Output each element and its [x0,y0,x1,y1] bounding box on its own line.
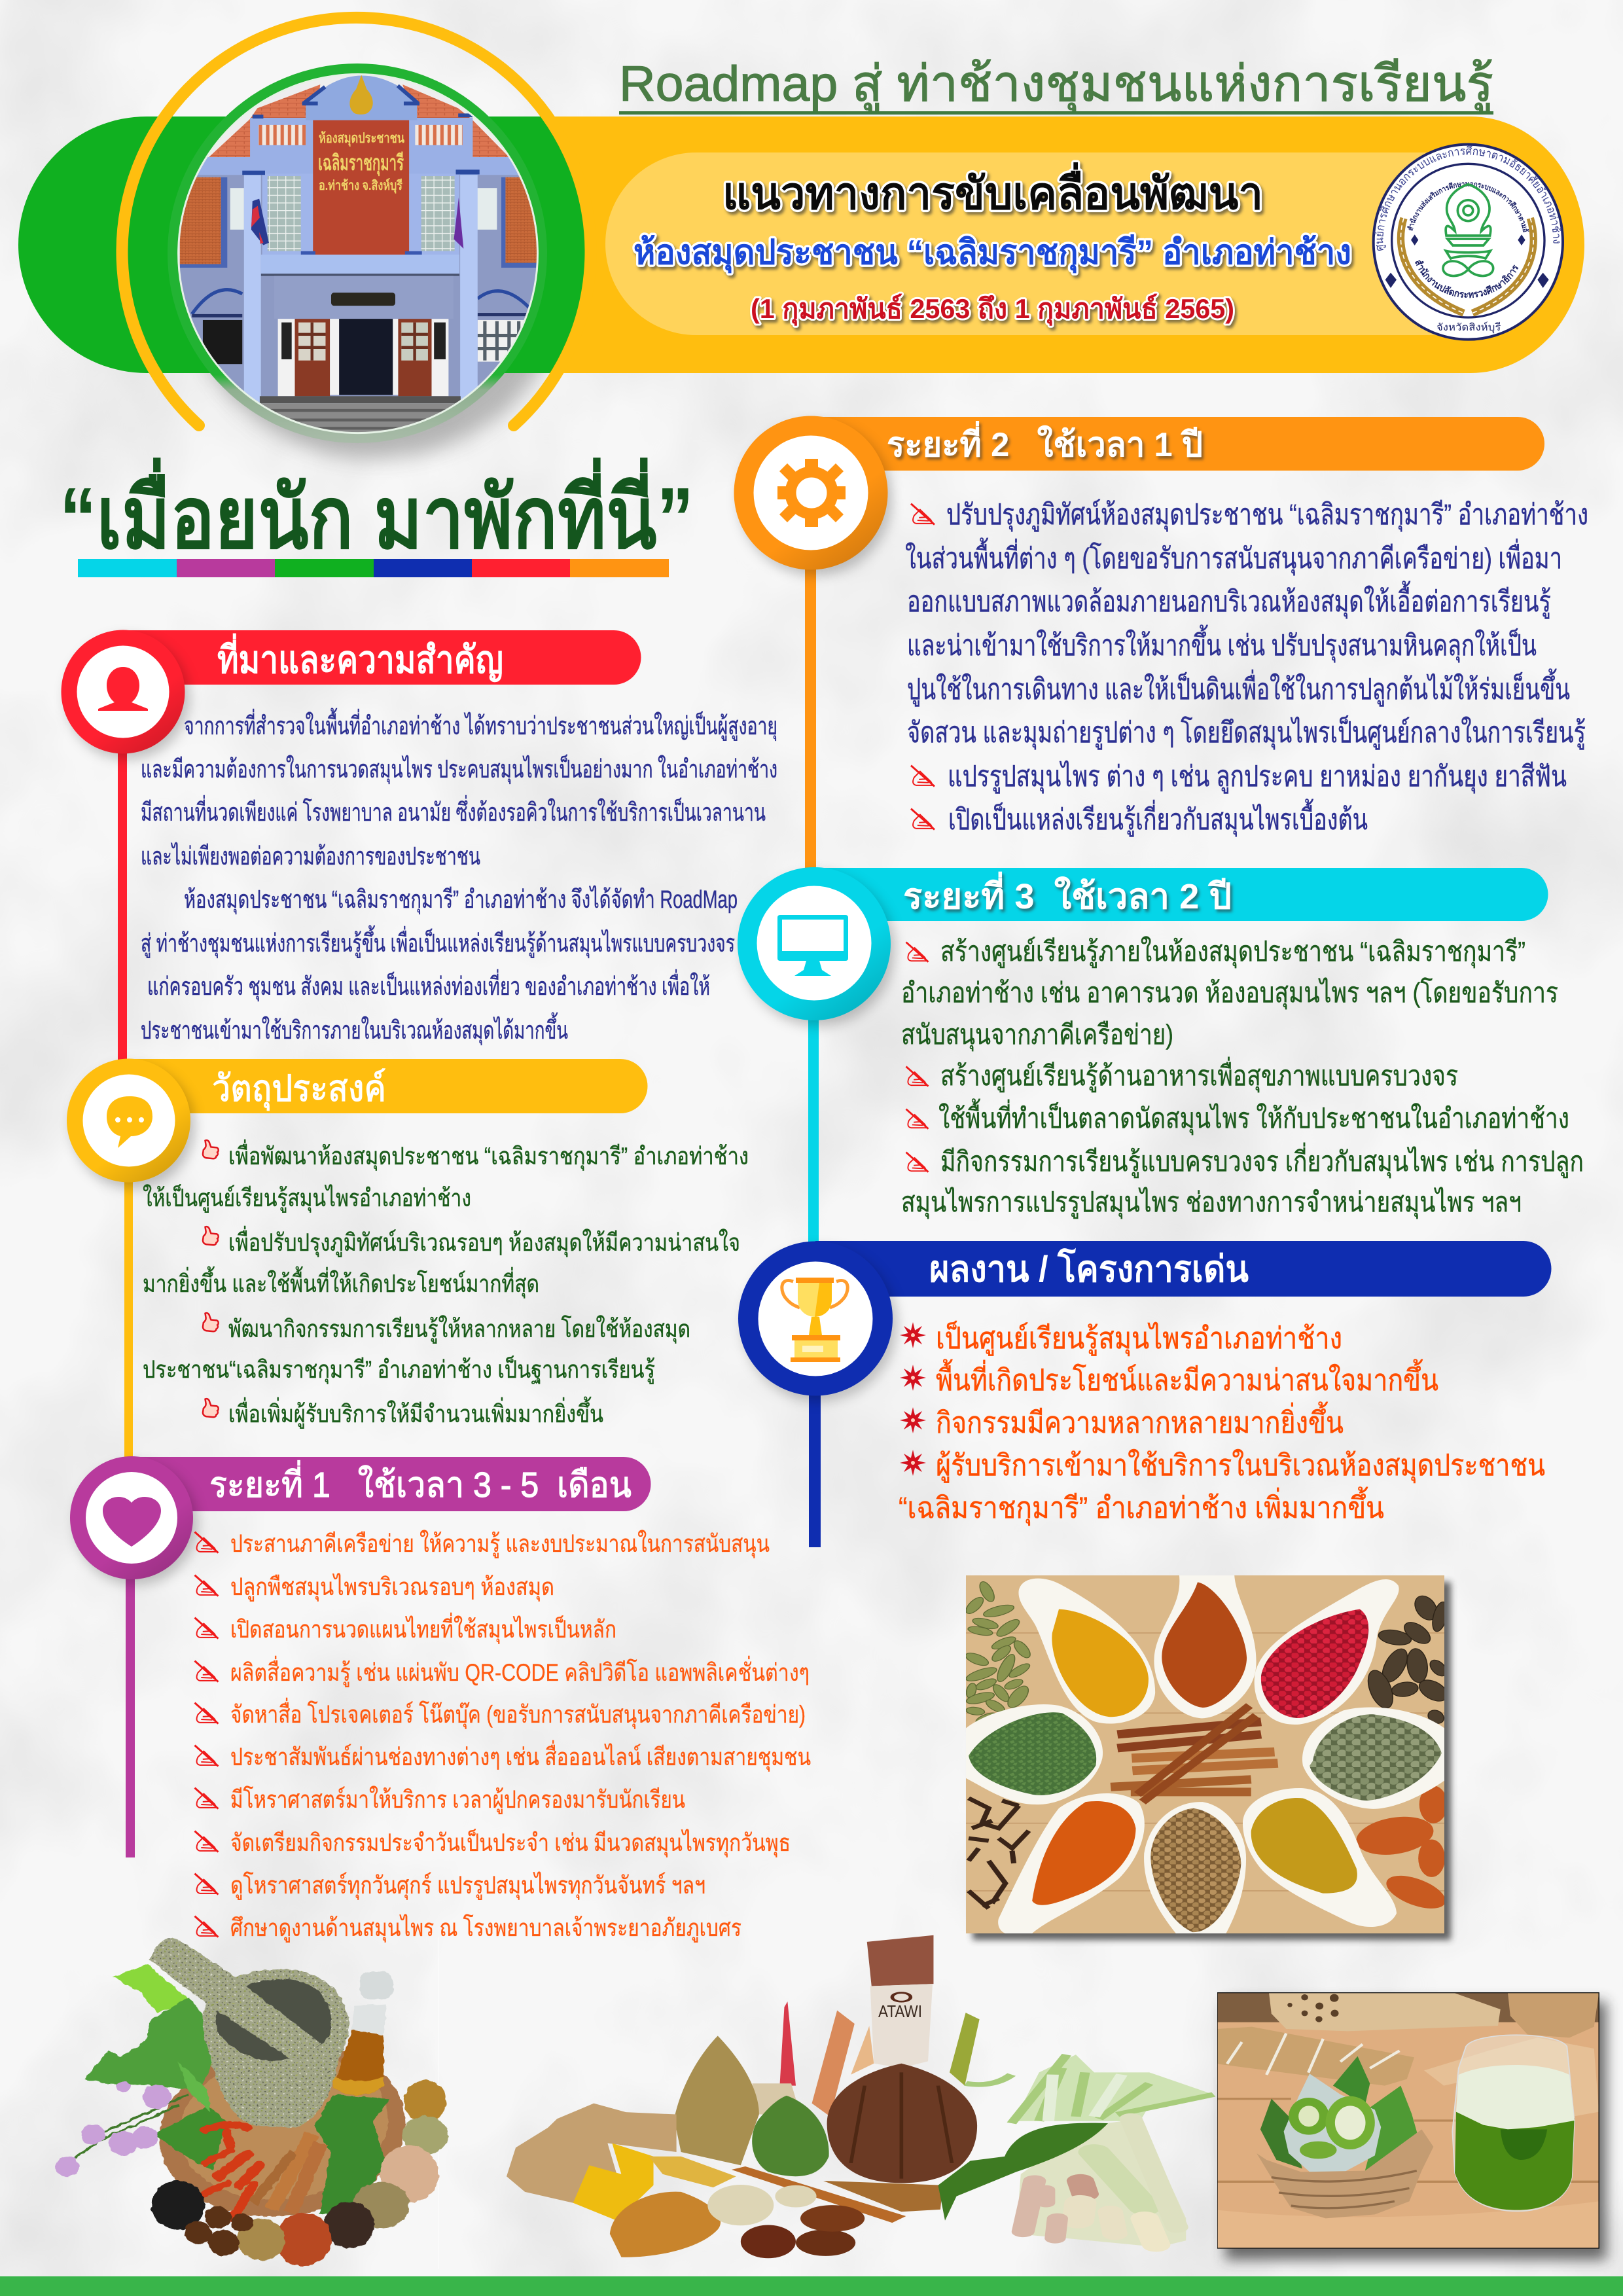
red header bar [123,630,641,685]
bottom green strip [0,2276,1623,2296]
photo soft shadow [190,118,563,458]
turmeric and spices [573,2143,906,2258]
body text: เพื่อพัฒนาห้องสมุดประชาชน “เฉลิมราชกุมารี” อำเภอท่าช้าง [228,1139,749,1171]
leaves and lemongrass [938,2054,1213,2247]
body text: พัฒนากิจกรรมการเรียนรู้ให้หลากหลาย โดยใช้ห้องสมุด [228,1315,690,1344]
red timeline [118,740,127,1067]
banner heading lines [633,162,1351,326]
body text: ให้เป็นศูนย์เรียนรู้สมุนไพรอำเภอท่าช้าง [143,1183,471,1213]
seal: สำนักงานปลัดกระทรวงศึกษาธิการ [1415,260,1518,298]
yellow circle badge [67,1059,190,1182]
heading: ที่มาและความสำคัญ [217,633,503,682]
icon: speech bubble [107,1096,152,1148]
body list [230,1530,811,1943]
orange circle badge [734,416,887,569]
green ring behind photo [168,63,547,443]
body text: ประชาชนเข้ามาใช้บริการภายในบริเวณห้องสมุดได้มากขึ้น [141,1012,568,1045]
body text [901,936,1584,1219]
red circle badge [62,630,185,754]
body list: มีโหราศาสตร์มาให้บริการ เวลาผู้ปกครองมารับนักเรียน [230,1785,685,1814]
heading: ผลงาน / โครงการเด่น [929,1247,1249,1289]
dates: (1 กุมภาพันธ์ 2563 ถึง 1 กุมภาพันธ์ 2565) [751,293,1234,326]
seal: ศูนย์การศึกษานอกระบบและการศึกษาตามอัธยาศัยอำเภอท่าช้าง [1374,145,1562,251]
body text: มากยิ่งขึ้น และใช้พื้นที่ให้เกิดประโยชน์มากที่สุด [143,1266,539,1299]
bullets: stars [900,1322,926,1476]
panel: phase 3 [738,867,1584,1244]
icon: trophy [782,1278,847,1362]
mace pieces [1351,1785,1453,1915]
body text [899,1321,1545,1526]
banner pale inner band [605,152,1440,335]
photo shadow: spices [972,1582,1451,1940]
icon: heart [103,1497,161,1547]
icon: person [98,667,148,711]
yellow header bar [128,1059,647,1113]
main heading: แนวทางการขับเคลื่อนพัฒนา [722,162,1263,219]
sign text on building: ห้องสมุดประชาชน [319,130,404,147]
panel: results [738,1241,1551,1547]
panel: phase 2 [734,416,1588,870]
body list: ปลูกพืชสมุนไพรบริเวณรอบๆ ห้องสมุด [230,1573,554,1602]
yellow timeline [124,1172,133,1460]
cloves [969,1798,1029,1909]
icon: monitor [777,915,848,976]
body text: สมุนไพรการแปรรูปสมุนไพร ช่องทางการจำหน่ายสมุนไพร ฯลฯ [901,1187,1522,1219]
body text: เพื่อปรับปรุงภูมิทัศน์บริเวณรอบๆ ห้องสมุดให้มีความน่าสนใจ [228,1225,740,1257]
library building photo [177,73,539,435]
body text: ห้องสมุดประชาชน “เฉลิมราชกุมารี” อำเภอท่าช้าง จึงได้จัดทำ RoadMap [184,886,738,914]
body list: ประชาสัมพันธ์ผ่านช่องทางต่างๆ เช่น สื่อออนไลน์ เสียงตามสายชุมชน [230,1740,811,1772]
purple header bar [132,1457,651,1511]
seal [1372,143,1564,341]
label on compress band: ATAWI [878,2001,922,2021]
panel: objectives [67,1059,749,1460]
purple timeline [126,1571,135,1857]
body list: ประสานภาคีเครือข่าย ให้ความรู้ และงบประมาณในการสนับสนุน [230,1530,770,1558]
bullets: thumbs [203,1140,219,1417]
body text: “เฉลิมราชกุมารี” อำเภอท่าช้าง เพิ่มมากขึ้น [899,1486,1384,1526]
body text: มีสถานที่นวดเพียงแค่ โรงพยาบาล อนามัย ซึ่งต้องรอคิวในการใช้บริการเป็นเวลานาน [141,795,766,827]
body list: ศึกษาดูงานด้านสมุนไพร ณ โรงพยาบาลเจ้าพระยาอภัยภูเบศร [230,1914,741,1943]
icon: gear [777,459,846,527]
banner orange band [497,117,1584,373]
big slogan: “เมื่อยนัก มาพักที่นี่” [60,457,694,566]
seal: จังหวัดสิงห์บุรี [1436,321,1501,334]
seal: สำนักงานส่งเสริมการศึกษานอกระบบและการศึกษาตามอัธยาศัย [1407,182,1529,232]
sign text on building [318,130,404,194]
banner green shape [18,117,586,373]
photo: mortar and herbs [55,1937,449,2267]
photo: bitter melon juice shadow [1225,2001,1607,2260]
body text: และมีความต้องการในการนวดสมุนไพร ประคบสมุนไพรเป็นอย่างมาก ในอำเภอท่าช้าง [141,754,777,784]
navy header bar [815,1241,1551,1297]
bullets: crossed pen [906,942,928,1172]
document title: Roadmap สู่ ท่าช้างชุมชนแห่งการเรียนรู้ [619,56,1493,114]
bullets: crossed pen [195,1532,219,1937]
purple circle badge [70,1456,193,1579]
heading: วัตถุประสงค์ [212,1067,386,1111]
heading: ระยะที่ 1 ใช้เวลา 3 - 5 เดือน [209,1460,632,1505]
body list: เปิดสอนการนวดแผนไทยที่ใช้สมุนไพรเป็นหลัก [230,1612,616,1644]
body text: เปิดเป็นแหล่งเรียนรู้เกี่ยวกับสมุนไพรเบื้องต้น [948,798,1368,837]
header banner [18,18,1584,458]
bullets: crossed pen [911,504,935,830]
body text: สร้างศูนย์เรียนรู้ด้านอาหารเพื่อสุขภาพแบบครบวงจร [940,1057,1458,1093]
cyan header bar [814,868,1548,921]
body list: ดูโหราศาสตร์ทุกวันศุกร์ แปรรูปสมุนไพรทุกวันจันทร์ ฯลฯ [230,1871,705,1900]
sub heading: ห้องสมุดประชาชน “เฉลิมราชกุมารี” อำเภอท่าช้าง [633,234,1351,274]
body list: จัดเตรียมกิจกรรมประจำวันเป็นประจำ เช่น มีนวดสมุนไพรทุกวันพุธ [230,1827,791,1857]
body text: พื้นที่เกิดประโยชน์และมีความน่าสนใจมากขึ้น [936,1359,1438,1397]
panel: background and importance [62,630,777,1067]
body text [905,499,1588,837]
body list: ผลิตสื่อความรู้ เช่น แผ่นพับ QR-CODE คลิปวิดีโอ แอพพลิเคชั่นต่างๆ [230,1655,810,1687]
body text: สู่ ท่าช้างชุมชนแห่งการเรียนรู้ขึ้น เพื่อเป็นแหล่งเรียนรู้ด้านสมุนไพรแบบครบวงจร [141,925,735,958]
sign text on building: อ.ท่าช้าง จ.สิงห์บุรี [319,178,402,194]
orange header bar [811,417,1544,471]
body text: จากการที่สำรวจในพื้นที่อำเภอท่าช้าง ได้ทราบว่าประชาชนส่วนใหญ่เป็นผู้สูงอายุ [184,708,777,741]
navy circle badge [738,1241,893,1395]
heading: ระยะที่ 2 ใช้เวลา 1 ปี [887,421,1203,464]
gold arc [122,18,590,425]
sign text on building: เฉลิมราชกุมารี [318,151,404,177]
cyan circle badge [738,867,891,1020]
colour bar [78,559,669,577]
body text: และไม่เพียงพอต่อความต้องการของประชาชน [141,842,480,870]
orange timeline [805,563,816,870]
body text [141,708,777,1045]
cardamom pods [963,1581,1033,1725]
body text: เพื่อเพิ่มผู้รับบริการให้มีจำนวนเพิ่มมากยิ่งขึ้น [228,1396,603,1429]
body text: สนับสนุนจากภาคีเครือข่าย) [901,1019,1173,1052]
body text: สร้างศูนย์เรียนรู้ภายในห้องสมุดประชาชน “เฉลิมราชกุมารี” [940,936,1525,969]
photo: bitter melon and juice [1217,1992,1599,2249]
heading: ระยะที่ 3 ใช้เวลา 2 ปี [903,871,1232,916]
navy timeline [809,1388,821,1547]
dark pods [1363,1594,1453,1726]
photo: herbal compress and roots [507,1935,1216,2258]
stalks and roots behind the compress [507,2001,980,2203]
body text: เป็นศูนย์เรียนรู้สมุนไพรอำเภอท่าช้าง [936,1321,1342,1356]
body text: แก่ครอบครัว ชุมชน สังคม และเป็นแหล่งท่องเที่ยว ของอำเภอท่าช้าง เพื่อให้ [147,969,710,1001]
body list: จัดหาสื่อ โปรเจคเตอร์ โน๊ตบุ๊ค (ขอรับการสนับสนุนจากภาคีเครือข่าย) [230,1697,806,1729]
body text [143,1139,749,1429]
photo: spices in white spoons [966,1575,1444,1933]
panel: phase 1 [70,1456,811,1943]
body text: ประชาชน“เฉลิมราชกุมารี” อำเภอท่าช้าง เป็นฐานการเรียนรู้ [143,1354,655,1384]
herbal compress ball [823,1935,977,2212]
cyan timeline [808,1014,819,1244]
body text: กิจกรรมมีความหลากหลายมากยิ่งขึ้น [936,1401,1344,1439]
body text: ผู้รับบริการเข้ามาใช้บริการในบริเวณห้องสมุดประชาชน [936,1448,1545,1483]
